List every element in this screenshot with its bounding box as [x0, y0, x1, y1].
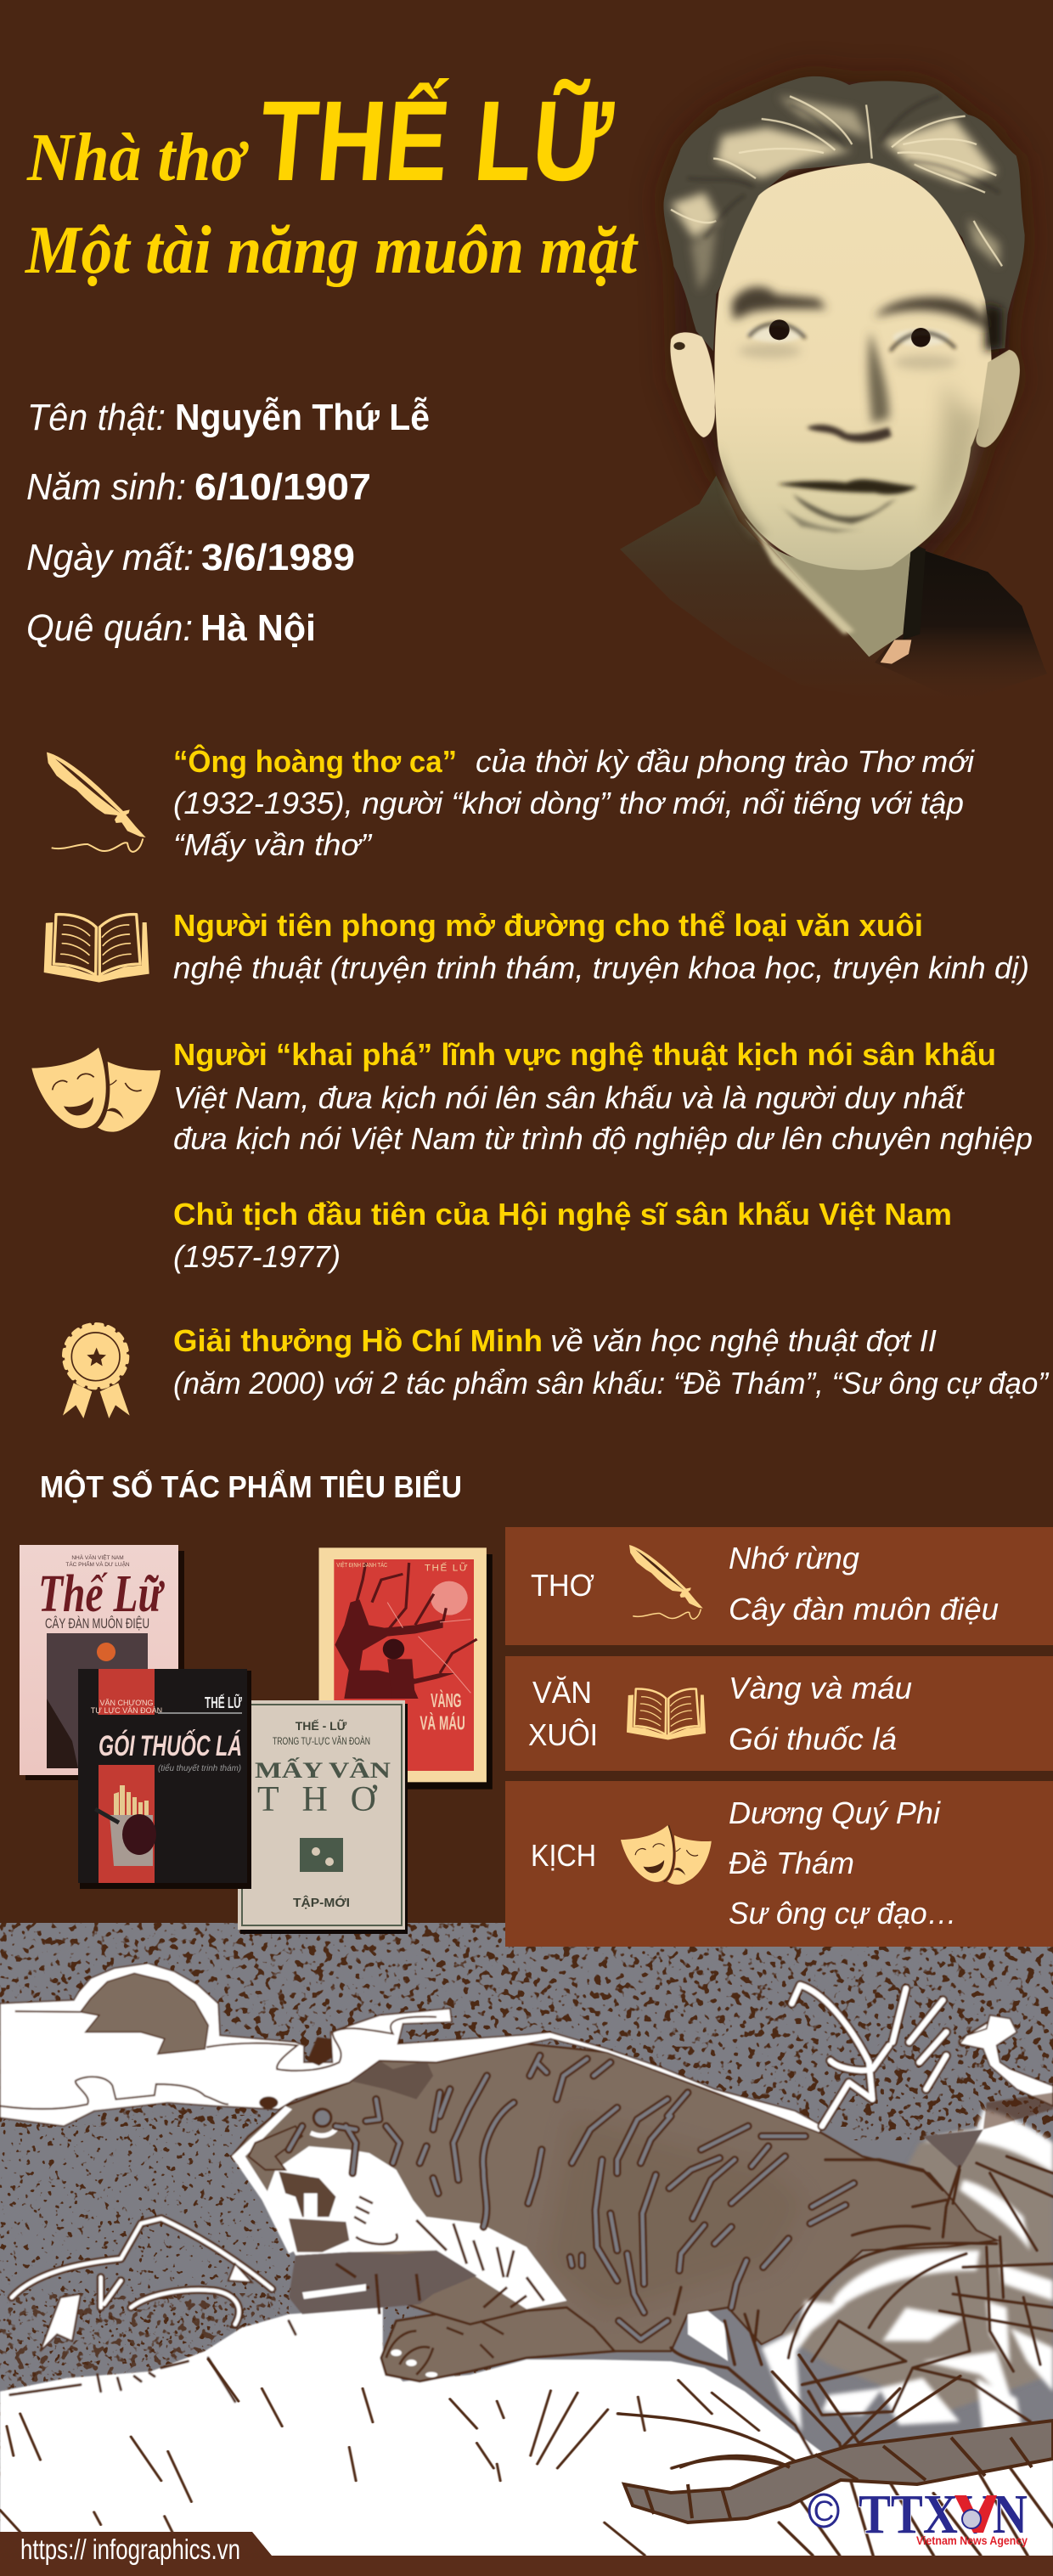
paw claws: [386, 2321, 504, 2375]
white cloud: [0, 1964, 823, 2133]
book cover: Vàng và máu: [319, 1547, 493, 1790]
ground strip dark: [289, 2251, 476, 2314]
text block: chairman: [173, 1197, 952, 1274]
wedge white: [688, 2311, 728, 2361]
book cover: Cây đàn muôn điệu: [20, 1545, 184, 1780]
panel: prose: Gói thuốc lá: [729, 1722, 897, 1756]
text block: award: [173, 1323, 1050, 1401]
title: Nhà thơ: [26, 121, 249, 195]
text block: theatre: đưa kịch nói Việt Nam từ trình độ nghiệp dư lên chuyên nghiệp: [173, 1121, 1033, 1156]
book cover: Mấy vần thơ: THẾ - LỮ: [296, 1718, 347, 1733]
ground: [0, 2308, 1053, 2566]
tiger illustration: [0, 1923, 1053, 2566]
text block: poetry: “Ông hoàng thơ ca”: [173, 743, 457, 779]
heading: selected works: MỘT SỐ TÁC PHẨM TIÊU BIỂU: [40, 1468, 462, 1504]
title: Một tài năng muôn mặt: [24, 213, 639, 288]
profile facts: Ngày mất:: [26, 537, 194, 578]
text block: poetry: [173, 743, 975, 862]
white streaks: [762, 2110, 1053, 2438]
book cover: Gói thuốc lá: [78, 1669, 251, 1889]
snout and mouth: [249, 2126, 302, 2170]
text block: chairman: Chủ tịch đầu tiên của Hội nghệ sĩ sân khấu Việt Nam: [173, 1197, 952, 1232]
book cover: Mấy vần thơ: TRONG TỰ-LỰC VĂN ĐOÀN: [273, 1734, 370, 1747]
text block: award: Giải thưởng Hồ Chí Minh: [173, 1323, 543, 1358]
book cover: Gói thuốc lá: GÓI THUỐC LÁ: [99, 1729, 242, 1762]
book cover: Cây đàn muôn điệu: Thế Lữ: [38, 1565, 165, 1623]
text block: prose: [173, 908, 1029, 985]
chest hair lines: [416, 2220, 544, 2308]
text block: award: về văn học nghệ thuật đợt II: [550, 1323, 937, 1358]
moon: [81, 1973, 208, 2054]
text block: poetry: “Mấy vần thơ”: [173, 827, 373, 862]
icon: theatre masks: [31, 1047, 160, 1132]
panel: poetry: THƠ: [531, 1568, 594, 1603]
title: THẾ LỮ: [254, 77, 617, 205]
text block: theatre: Việt Nam, đưa kịch nói lên sân khấu và là người duy nhất: [173, 1080, 966, 1115]
paw: [381, 2308, 615, 2382]
book cover: Cây đàn muôn điệu: CÂY ĐÀN MUÔN ĐIỆU: [45, 1615, 149, 1632]
text block: theatre: Người “khai phá” lĩnh vực nghệ thuật kịch nói sân khấu: [173, 1037, 996, 1072]
logo: TTXVN: TTXVN: [859, 2483, 1028, 2545]
text block: prose: nghệ thuật (truyện trinh thám, truyện khoa học, truyện kinh dị): [173, 950, 1029, 985]
lower tangle: [624, 2421, 1053, 2522]
icon: feather quill small: [629, 1545, 703, 1619]
book cover: Vàng và máu: THẾ LỮ: [425, 1563, 468, 1573]
profile facts: Quê quán:: [26, 607, 193, 649]
profile facts: 6/10/1907: [194, 466, 371, 508]
icon: award medal: [63, 1324, 130, 1418]
text block: poetry: (1932-1935), người “khơi dòng” thơ mới, nổi tiếng với tập: [173, 786, 964, 820]
icon: open book small: [627, 1688, 706, 1739]
panel: theatre: [505, 1781, 1053, 1947]
panel: poetry: [505, 1527, 1053, 1645]
logo: TTXVN: [809, 2483, 1028, 2547]
text block: poetry: của thời kỳ đầu phong trào Thơ mới: [476, 744, 975, 779]
profile facts: Năm sinh:: [26, 466, 186, 508]
panel: prose: XUÔI: [528, 1717, 598, 1752]
logo: TTXVN: C: [814, 2495, 834, 2528]
profile facts: [26, 396, 430, 649]
tiger face and chest white: [265, 2146, 566, 2309]
icon: feather quill: [47, 753, 146, 852]
profile facts: 3/6/1989: [201, 537, 355, 578]
book cover: Gói thuốc lá: (tiểu thuyết trinh thám): [158, 1763, 241, 1773]
panel: poetry: Cây đàn muôn điệu: [729, 1592, 999, 1626]
book cover: Vàng và máu: VIỆT ĐỊNH DANH TÁC: [336, 1561, 388, 1569]
text block: chairman: (1957-1977): [173, 1239, 341, 1274]
panel: theatre: Dương Quý Phi: [729, 1795, 941, 1830]
left grass blades: [12, 2218, 272, 2325]
profile facts: Nguyễn Thứ Lễ: [175, 396, 430, 438]
book cover: Mấy vần thơ: THƠ: [257, 1780, 378, 1819]
panel: poetry: Nhớ rừng: [729, 1541, 859, 1575]
portrait photo: [620, 76, 1047, 702]
profile facts: Hà Nội: [200, 607, 316, 649]
footer band: https:// infographics.vn: [20, 2534, 240, 2565]
text block: award: (năm 2000) với 2 tác phẩm sân khấu: “Đề Thám”, “Sư ông cự đạo”: [173, 1366, 1050, 1401]
stripes: [289, 2055, 854, 2339]
profile facts: Tên thật:: [27, 397, 166, 438]
book cover: Mấy vần thơ: MẤY VẦN: [255, 1758, 391, 1783]
text block: prose: Người tiên phong mở đường cho thể loại văn xuôi: [173, 908, 923, 943]
text block: theatre: [173, 1037, 1033, 1156]
book cover: Vàng và máu: VÀ MÁU: [420, 1712, 465, 1734]
panel: theatre: Đề Thám: [729, 1846, 854, 1880]
panel: theatre: KỊCH: [531, 1838, 596, 1873]
book cover: Gói thuốc lá: VĂN CHƯƠNG: [100, 1699, 153, 1707]
book cover: Mấy vần thơ: [238, 1700, 408, 1934]
book cover: Gói thuốc lá: TỰ LỰC VĂN ĐOÀN: [91, 1706, 162, 1715]
tiger body: [232, 2043, 997, 2382]
footer band: [0, 2532, 1053, 2576]
soft right grass: [782, 2129, 1053, 2411]
book cover: Cây đàn muôn điệu: NHÀ VĂN VIỆT NAM: [71, 1553, 124, 1561]
white plant branch: [791, 1985, 990, 2126]
grass strands: [671, 2156, 1053, 2455]
book cover: Mấy vần thơ: TẬP-MỚI: [293, 1895, 350, 1910]
book cover: Vàng và máu: VÀNG: [431, 1689, 461, 1712]
panel: prose: [505, 1656, 1053, 1771]
icon: masks small: [621, 1825, 712, 1885]
grass strokes lower: [0, 2355, 1053, 2556]
panel: theatre: Sư ông cự đạo…: [729, 1896, 957, 1931]
dark head patch: [349, 2060, 433, 2100]
title: [24, 77, 639, 288]
panel: prose: VĂN: [532, 1675, 592, 1710]
panel: prose: Vàng và máu: [729, 1671, 912, 1705]
book cover: Gói thuốc lá: THẾ LỮ: [205, 1694, 242, 1711]
icon: open book: [44, 915, 149, 983]
logo: TTXVN: Vietnam News Agency: [916, 2534, 1028, 2547]
book cover: Cây đàn muôn điệu: TÁC PHẨM VÀ DƯ LUẬN: [65, 1560, 130, 1568]
